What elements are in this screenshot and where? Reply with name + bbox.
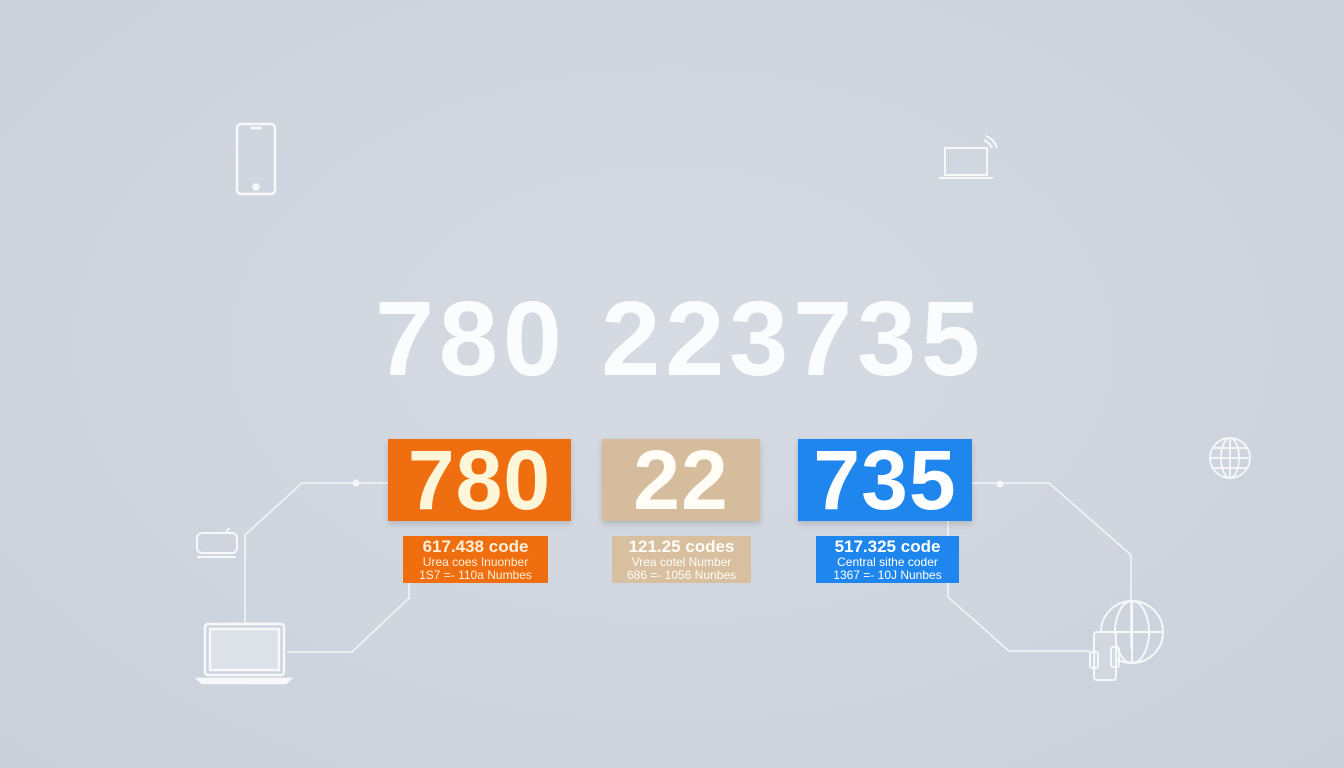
stat box: orange 780: 780 — [408, 432, 551, 526]
caption: blue: 517.325 code — [835, 537, 940, 556]
icon: phone — [237, 124, 275, 194]
caption: tan: Vrea cotel Number — [632, 555, 731, 569]
stat box: tan 22: 22 — [633, 432, 729, 526]
caption: orange: 617.438 code — [423, 537, 528, 556]
caption: tan: 121.25 codes — [629, 537, 734, 556]
icon: small laptop top right — [939, 136, 997, 178]
caption: orange: 1S7 =- 110a Numbes — [419, 568, 532, 582]
icon: device left — [197, 528, 237, 557]
stat box: tan 22 — [602, 439, 760, 521]
icon: globe with phone bottom right — [1090, 601, 1163, 680]
icon: globe right — [1210, 438, 1250, 478]
caption: orange: Urea coes Inuonber — [423, 555, 528, 569]
title: large number: 780 223735 — [375, 280, 985, 398]
icon: laptop bottom left — [198, 624, 290, 683]
caption: tan — [612, 536, 751, 583]
caption: tan: 686 =- 1056 Nunbes — [627, 568, 736, 582]
caption: blue — [816, 536, 959, 583]
stat box: blue 735: 735 — [813, 432, 957, 526]
caption: blue: 1367 =- 10J Nunbes — [833, 568, 942, 582]
caption: orange — [403, 536, 548, 583]
caption: blue: Central sithe coder — [837, 555, 938, 569]
